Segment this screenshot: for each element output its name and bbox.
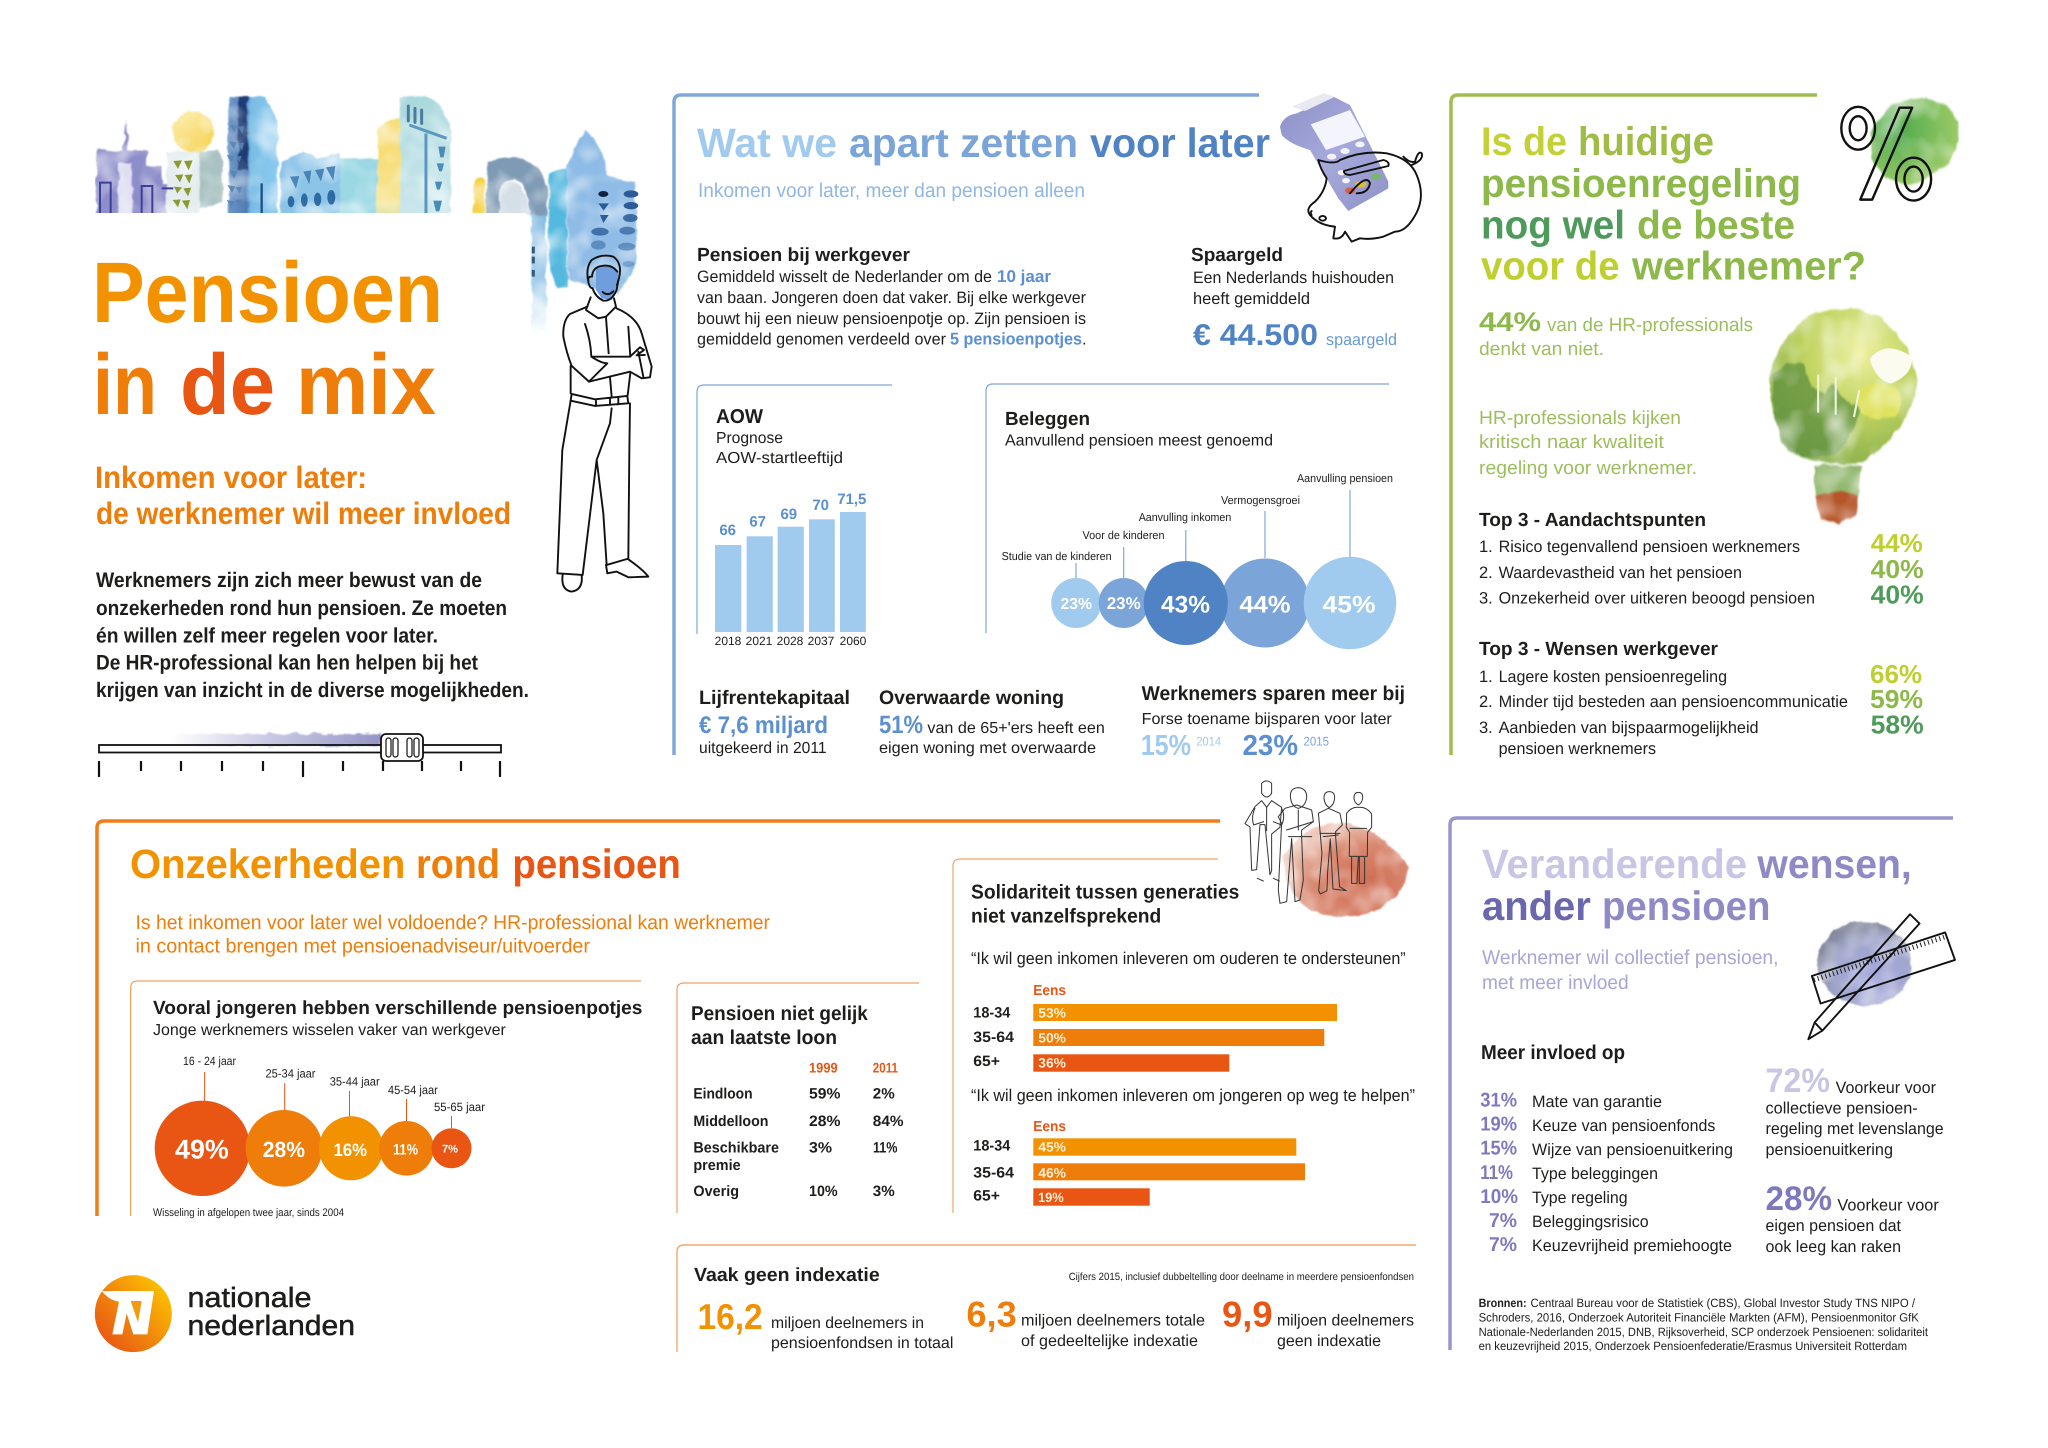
title: in — [93, 337, 157, 433]
bubble chart — [155, 1054, 485, 1196]
list: top 3 aandachtspunten: 1. — [1479, 538, 1493, 556]
block: pensioen bij werkgever: Gemiddeld wisselt de Nederlander om de — [697, 268, 992, 286]
bubble chart: 16 - 24 jaar — [183, 1054, 236, 1068]
sub-panel: vaak geen indexatie: miljoen deelnemers — [1277, 1313, 1414, 1330]
sub-panel: vaak geen indexatie: Cijfers 2015, inclusief dubbeltelling door deelname in meerdere pensioenfondsen — [1069, 1271, 1414, 1283]
list: top 3 wensen werkgever — [1479, 639, 1924, 758]
sub-panel: solidariteit tussen generaties: “Ik wil geen inkomen inleveren om jongeren op weg te helpen” — [971, 1086, 1415, 1105]
sub-panel: vaak geen indexatie: geen indexatie — [1277, 1333, 1381, 1350]
subheading — [136, 912, 770, 958]
block: werknemers sparen meer bij: 23% — [1242, 730, 1298, 762]
logo: nationale nederlanden: nederlanden — [188, 1310, 355, 1341]
text: 44 percent: denkt van niet. — [1479, 339, 1604, 360]
block: werknemers sparen meer bij: 15% — [1141, 730, 1191, 762]
block: overwaarde woning: eigen woning met overwaarde — [879, 740, 1096, 757]
list: top 3 aandachtspunten: 2. — [1479, 564, 1493, 582]
table: 11% — [873, 1140, 898, 1157]
bar chart: ouderen ondersteunen: 53% — [1038, 1005, 1066, 1020]
block: werknemers sparen meer bij: Werknemers sparen meer bij — [1142, 683, 1405, 705]
panel: onzekerheden rond pensioen — [97, 781, 1416, 1352]
block: lijfrentekapitaal — [699, 687, 850, 757]
sources — [1479, 1296, 1929, 1353]
bar chart: 66 — [719, 522, 736, 539]
table — [693, 1060, 904, 1200]
subheading: in contact brengen met pensioenadviseur/uitvoerder — [136, 936, 590, 958]
heading: wensen, — [1756, 841, 1912, 887]
bar chart — [715, 491, 867, 648]
list: top 3 wensen werkgever: 58% — [1871, 710, 1924, 740]
bubbles — [1002, 473, 1396, 649]
list: top 3 wensen werkgever: 3. — [1479, 719, 1493, 737]
sub-panel: pensioenpotjes: Vooral jongeren hebben verschillende pensioenpotjes — [153, 998, 642, 1019]
subtitle: Inkomen voor later: — [95, 460, 367, 495]
intro text: De HR-professional kan hen helpen bij het — [96, 652, 478, 674]
icon: four people on red wash — [1245, 781, 1408, 917]
bar chart: ouderen ondersteunen: 36% — [1038, 1055, 1066, 1070]
table: Middelloon — [693, 1113, 768, 1130]
logo: nationale nederlanden: nationale — [188, 1282, 312, 1313]
heading: pensioen — [1602, 883, 1770, 929]
bar chart: 71,5 — [837, 491, 866, 508]
block: pensioen bij werkgever: bouwt hij een nieuw pensioenpotje op. Zijn pensioen is — [697, 310, 1086, 328]
list: top 3 wensen werkgever: 66% — [1870, 659, 1922, 689]
list: top 3 aandachtspunten: 44% — [1871, 528, 1923, 558]
bubbles: Aanvulling inkomen — [1139, 512, 1231, 524]
block: spaargeld: spaargeld — [1326, 331, 1397, 349]
intro text — [96, 569, 529, 702]
list: meer invloed op: Keuzevrijheid premiehoogte — [1532, 1237, 1732, 1255]
sub-panel: solidariteit tussen generaties: Solidariteit tussen generaties — [971, 881, 1239, 903]
block: werknemers sparen meer bij: 2014 — [1196, 735, 1221, 749]
bar chart: jongeren op weg helpen: 45% — [1038, 1140, 1066, 1155]
sources: Schroders, 2016, Onderzoek Autoriteit Financiële Markten (AFM), Pensioenmonitor GfK — [1479, 1310, 1919, 1324]
bar chart: 2060 — [840, 634, 867, 648]
callout: 28 percent: ook leeg kan raken — [1766, 1238, 1901, 1256]
callout: 72 percent: 72% — [1766, 1062, 1830, 1100]
list: top 3 aandachtspunten: Waardevastheid van het pensioen — [1499, 564, 1742, 582]
list: meer invloed op: Keuze van pensioenfonds — [1532, 1117, 1715, 1135]
sub-panel: vaak geen indexatie: miljoen deelnemers in — [771, 1315, 924, 1332]
icon: pencil and ruler on watercolor wash — [1808, 914, 1955, 1039]
sub-panel: pensioenpotjes: Jonge werknemers wisselen vaker van werkgever — [153, 1022, 506, 1039]
block: werknemers sparen meer bij: Forse toename bijsparen voor later — [1142, 711, 1392, 728]
sub-panel: AOW bar chart — [697, 385, 892, 648]
icon: watercolor tree — [1770, 309, 1917, 524]
sub-panel: solidariteit tussen generaties: niet vanzelfsprekend — [971, 905, 1161, 927]
title: de — [180, 337, 275, 433]
callout: 72 percent: pensioenuitkering — [1766, 1141, 1893, 1159]
heading — [130, 841, 681, 887]
callout: 72 percent: Voorkeur voor — [1836, 1079, 1936, 1097]
text: HR-professionals: kritisch naar kwaliteit — [1479, 432, 1665, 453]
sources: Bronnen: — [1479, 1296, 1527, 1310]
text: HR-professionals: regeling voor werknemer. — [1479, 458, 1697, 479]
infographic canvas — [94, 93, 1960, 1352]
callout: 72 percent: regeling met levenslange — [1766, 1120, 1944, 1138]
subheading — [1482, 947, 1778, 994]
subheading: Werknemer wil collectief pensioen, — [1482, 947, 1778, 969]
bar chart: jongeren op weg helpen: Eens — [1033, 1119, 1066, 1135]
list: meer invloed op: 7% — [1489, 1210, 1517, 1232]
sub-panel: AOW bar chart: AOW-startleeftijd — [716, 450, 843, 467]
table: 3% — [873, 1183, 895, 1200]
bar chart: jongeren op weg helpen: 18-34 — [973, 1138, 1011, 1155]
sub-panel: vaak geen indexatie: miljoen deelnemers totale — [1021, 1313, 1205, 1330]
list: meer invloed op — [1480, 1042, 1733, 1256]
bar chart: jongeren op weg helpen: 46% — [1038, 1165, 1066, 1180]
bubbles: Studie van de kinderen — [1002, 551, 1112, 563]
list: meer invloed op: 31% — [1480, 1089, 1517, 1111]
list: meer invloed op: Type regeling — [1532, 1189, 1628, 1207]
bar chart: jongeren op weg helpen: 35-64 — [973, 1164, 1015, 1181]
panel: veranderende wensen — [1450, 818, 1955, 1353]
subtitle — [95, 460, 511, 531]
list: top 3 aandachtspunten: 3. — [1479, 590, 1493, 608]
table: 3% — [809, 1140, 832, 1157]
list: meer invloed op: Wijze van pensioenuitkering — [1532, 1141, 1733, 1159]
list: top 3 aandachtspunten: Top 3 - Aandachtspunten — [1479, 510, 1706, 531]
sub-panel: vaak geen indexatie: 6,3 — [966, 1294, 1017, 1335]
sub-panel: vaak geen indexatie: of gedeeltelijke indexatie — [1021, 1333, 1198, 1350]
block: werknemers sparen meer bij — [1141, 683, 1405, 762]
heading: de beste — [1637, 204, 1795, 248]
bar chart: 2028 — [777, 634, 804, 648]
block: spaargeld: € 44.500 — [1193, 319, 1318, 352]
table: premie — [693, 1157, 741, 1174]
callout: 28 percent: eigen pensioen dat — [1766, 1217, 1901, 1235]
text: HR-professionals — [1479, 408, 1697, 479]
list: top 3 aandachtspunten: Risico tegenvallend pensioen werknemers — [1499, 538, 1800, 556]
bubbles: 23% — [1107, 594, 1141, 613]
heading: Wat we — [697, 120, 837, 166]
sub-panel: pensioenpotjes: Wisseling in afgelopen twee jaar, sinds 2004 — [153, 1207, 344, 1219]
panel: wat we apart zetten voor later — [674, 93, 1422, 762]
list: top 3 aandachtspunten: 40% — [1871, 554, 1924, 584]
callout: 72 percent — [1766, 1062, 1944, 1159]
logo: nationale nederlanden — [95, 1275, 355, 1352]
panel frame — [1450, 818, 1953, 1350]
list: top 3 wensen werkgever: 2. — [1479, 693, 1493, 711]
heading: apart zetten — [849, 120, 1078, 166]
list: top 3 wensen werkgever: Aanbieden van bijspaarmogelijkheid — [1499, 719, 1759, 737]
heading: Is de — [1481, 120, 1567, 164]
table: Overig — [693, 1183, 739, 1200]
heading: voor later — [1090, 120, 1270, 166]
illustration: watercolor skyline — [96, 96, 451, 223]
list: top 3 aandachtspunten — [1479, 510, 1924, 610]
block: spaargeld: heeft gemiddeld — [1193, 290, 1310, 308]
bar chart: ouderen ondersteunen: 35-64 — [973, 1029, 1015, 1046]
table: 10% — [809, 1183, 838, 1200]
block: overwaarde woning: Overwaarde woning — [879, 687, 1064, 709]
sub-panel: beleggen bubble chart: Aanvullend pensioen meest genoemd — [1005, 433, 1273, 450]
block: pensioen bij werkgever — [697, 245, 1087, 348]
bar chart: ouderen ondersteunen — [973, 983, 1337, 1072]
sub-panel: AOW bar chart: Prognose — [716, 430, 783, 447]
subheading: Inkomen voor later, meer dan pensioen alleen — [698, 180, 1085, 202]
heading: voor de — [1481, 244, 1620, 288]
block: lijfrentekapitaal: uitgekeerd in 2011 — [699, 740, 827, 757]
illustration: pension slider — [99, 734, 501, 777]
heading: werknemer? — [1631, 244, 1866, 288]
heading — [1481, 120, 1866, 288]
intro text: Werknemers zijn zich meer bewust van de — [96, 569, 482, 592]
bubbles: Vermogensgroei — [1221, 495, 1300, 507]
bar chart: 2018 — [715, 634, 742, 648]
list: top 3 aandachtspunten: Onzekerheid over uitkeren beoogd pensioen — [1499, 590, 1815, 608]
text: 44 percent: van de HR-professionals — [1547, 315, 1753, 336]
text: 44 percent — [1479, 307, 1753, 360]
bubble chart: 25-34 jaar — [266, 1067, 316, 1081]
sub-panel: solidariteit tussen generaties — [953, 859, 1415, 1213]
list: meer invloed op: Meer invloed op — [1481, 1042, 1625, 1064]
title: Pensioen — [92, 245, 443, 341]
bar chart: jongeren op weg helpen: 65+ — [973, 1188, 1000, 1205]
bar chart: 70 — [812, 497, 829, 514]
heading: pensioen — [512, 841, 681, 887]
list: meer invloed op: 15% — [1480, 1138, 1517, 1160]
title: mix — [296, 337, 436, 433]
list: meer invloed op: 7% — [1489, 1234, 1517, 1256]
sub-panel: vaak geen indexatie: 16,2 — [698, 1296, 763, 1337]
bubbles: 43% — [1161, 592, 1210, 618]
list: top 3 wensen werkgever: Top 3 - Wensen werkgever — [1479, 639, 1719, 660]
bar chart: 69 — [780, 506, 797, 523]
icon: payment terminal and piggy bank — [1280, 93, 1422, 242]
bubble chart: 16% — [334, 1140, 367, 1160]
block: pensioen bij werkgever: gemiddeld genomen verdeeld over — [697, 330, 946, 348]
sub-panel: vaak geen indexatie: Vaak geen indexatie — [694, 1265, 880, 1286]
bubble chart: 7% — [442, 1144, 458, 1156]
block: lijfrentekapitaal: € 7,6 miljard — [699, 712, 828, 739]
block: overwaarde woning: van de 65+'ers heeft een — [927, 720, 1105, 737]
bubble chart: 49% — [175, 1134, 229, 1164]
sub-panel: solidariteit tussen generaties: “Ik wil geen inkomen inleveren om ouderen te ondersteunen” — [971, 949, 1406, 968]
sub-panel: vaak geen indexatie: 9,9 — [1222, 1294, 1273, 1335]
table: 2% — [873, 1085, 895, 1102]
list: top 3 wensen werkgever: pensioen werknemers — [1499, 740, 1656, 758]
block: pensioen bij werkgever: . — [1082, 330, 1087, 348]
list: meer invloed op: Mate van garantie — [1532, 1093, 1662, 1111]
callout: 28 percent: 28% — [1766, 1180, 1832, 1218]
bar chart: 67 — [749, 514, 766, 531]
bar chart: 2021 — [746, 634, 773, 648]
sources: en keuzevrijheid 2015, Onderzoek Pensioenfederatie/Erasmus Universiteit Rotterdam — [1479, 1339, 1907, 1353]
heading: nog wel — [1481, 204, 1625, 248]
sources: Centraal Bureau voor de Statistiek (CBS), Global Investor Study TNS NIPO / — [1530, 1296, 1916, 1310]
bubbles: Voor de kinderen — [1082, 530, 1164, 542]
list: meer invloed op: Beleggingsrisico — [1532, 1213, 1649, 1231]
table: 1999 — [809, 1060, 838, 1076]
bubbles: 44% — [1240, 592, 1290, 618]
text: HR-professionals: HR-professionals kijken — [1479, 408, 1681, 429]
list: meer invloed op: 19% — [1480, 1114, 1517, 1136]
bar chart: ouderen ondersteunen: 65+ — [973, 1053, 1000, 1070]
callout: 28 percent: Voorkeur voor — [1837, 1197, 1939, 1215]
bar chart: jongeren op weg helpen — [973, 1119, 1305, 1206]
list: top 3 wensen werkgever: 59% — [1870, 684, 1923, 714]
list: top 3 wensen werkgever: 1. — [1479, 668, 1493, 686]
panel frame — [674, 95, 1259, 755]
bar chart: ouderen ondersteunen: Eens — [1033, 983, 1066, 999]
bubble chart: 35-44 jaar — [330, 1075, 380, 1089]
panel: intro — [92, 96, 652, 790]
block: pensioen bij werkgever: Pensioen bij werkgever — [697, 245, 911, 266]
subheading: Is het inkomen voor later wel voldoende? HR-professional kan werknemer — [136, 912, 770, 934]
icon: percent sign on green wash — [1841, 98, 1958, 201]
heading: Veranderende — [1482, 841, 1747, 887]
list: meer invloed op: Type beleggingen — [1532, 1165, 1658, 1183]
sub-panel: beleggen bubble chart — [986, 384, 1396, 649]
heading — [1482, 841, 1912, 929]
panel frame — [97, 821, 1220, 1216]
heading: huidige — [1578, 120, 1714, 164]
table: 59% — [809, 1085, 840, 1102]
table: 28% — [809, 1113, 840, 1130]
intro text: krijgen van inzicht in de diverse mogelijkheden. — [96, 679, 529, 702]
sub-panel: AOW bar chart: AOW — [716, 406, 763, 428]
block: spaargeld: Een Nederlands huishouden — [1193, 269, 1394, 287]
bar chart: 2037 — [808, 634, 835, 648]
heading — [697, 120, 1270, 166]
block: spaargeld: Spaargeld — [1191, 245, 1283, 266]
bar chart: ouderen ondersteunen: 18-34 — [973, 1004, 1011, 1021]
callout: 72 percent: collectieve pensioen- — [1766, 1100, 1918, 1118]
bubbles: Aanvulling pensioen — [1297, 473, 1393, 485]
sources: Nationale-Nederlanden 2015, DNB, Rijksoverheid, SCP onderzoek Pensioenen: solidariteit — [1479, 1325, 1929, 1339]
table: Eindloon — [693, 1085, 753, 1102]
text: 44 percent: 44% — [1479, 307, 1541, 337]
block: lijfrentekapitaal: Lijfrentekapitaal — [699, 687, 850, 709]
table: 2011 — [873, 1060, 898, 1076]
list: meer invloed op: 11% — [1480, 1162, 1513, 1184]
bubble chart: 28% — [263, 1137, 305, 1162]
bubble chart: 55-65 jaar — [434, 1100, 485, 1114]
panel frame — [1451, 95, 1817, 755]
block: overwaarde woning — [879, 687, 1105, 757]
heading: ander — [1482, 883, 1591, 929]
subtitle: de werknemer wil meer invloed — [96, 496, 511, 531]
block: pensioen bij werkgever: 5 pensioenpotjes — [950, 330, 1082, 348]
block: spaargeld — [1191, 245, 1397, 352]
table: Beschikbare — [693, 1140, 779, 1157]
panel: huidige pensioenregeling — [1451, 95, 1958, 758]
sub-panel: pensioen niet gelijk aan laatste loon: aan laatste loon — [691, 1027, 837, 1049]
heading: pensioenregeling — [1481, 162, 1801, 206]
heading: Onzekerheden — [130, 841, 405, 887]
bar chart: ouderen ondersteunen: 50% — [1038, 1030, 1066, 1045]
sub-panel: pensioenpotjes — [131, 981, 642, 1219]
illustration: watercolor buildings behind man — [473, 131, 638, 330]
sub-panel: pensioen niet gelijk aan laatste loon — [677, 983, 919, 1213]
sub-panel: vaak geen indexatie: pensioenfondsen in totaal — [771, 1335, 953, 1352]
heading: rond — [416, 841, 500, 887]
callout: 28 percent — [1766, 1180, 1939, 1256]
bar chart: jongeren op weg helpen: 19% — [1038, 1190, 1064, 1205]
block: pensioen bij werkgever: van baan. Jongeren doen dat vaker. Bij elke werkgever — [697, 289, 1086, 307]
list: top 3 wensen werkgever: Minder tijd besteden aan pensioencommunicatie — [1499, 693, 1848, 711]
bubble chart: 11% — [393, 1142, 418, 1159]
subheading: met meer invloed — [1482, 972, 1629, 994]
sub-panel: beleggen bubble chart: Beleggen — [1005, 409, 1090, 430]
bubbles: 45% — [1322, 592, 1376, 618]
list: top 3 aandachtspunten: 40% — [1871, 580, 1924, 610]
list: meer invloed op: 10% — [1480, 1186, 1518, 1208]
intro white card — [96, 213, 530, 790]
illustration: man with crossed arms — [557, 256, 652, 592]
bubble chart: 45-54 jaar — [388, 1083, 438, 1097]
title — [92, 245, 443, 433]
intro text: onzekerheden rond hun pensioen. Ze moeten — [96, 597, 507, 620]
block: overwaarde woning: 51% — [879, 711, 923, 739]
block: werknemers sparen meer bij: 2015 — [1304, 735, 1329, 749]
sub-panel: pensioen niet gelijk aan laatste loon: Pensioen niet gelijk — [691, 1003, 869, 1025]
block: pensioen bij werkgever: 10 jaar — [997, 267, 1051, 286]
bubbles: 23% — [1060, 596, 1092, 613]
sub-panel: vaak geen indexatie — [677, 1245, 1416, 1352]
table: 84% — [873, 1113, 904, 1130]
list: top 3 wensen werkgever: Lagere kosten pensioenregeling — [1499, 668, 1727, 686]
intro text: én willen zelf meer regelen voor later. — [96, 624, 438, 648]
